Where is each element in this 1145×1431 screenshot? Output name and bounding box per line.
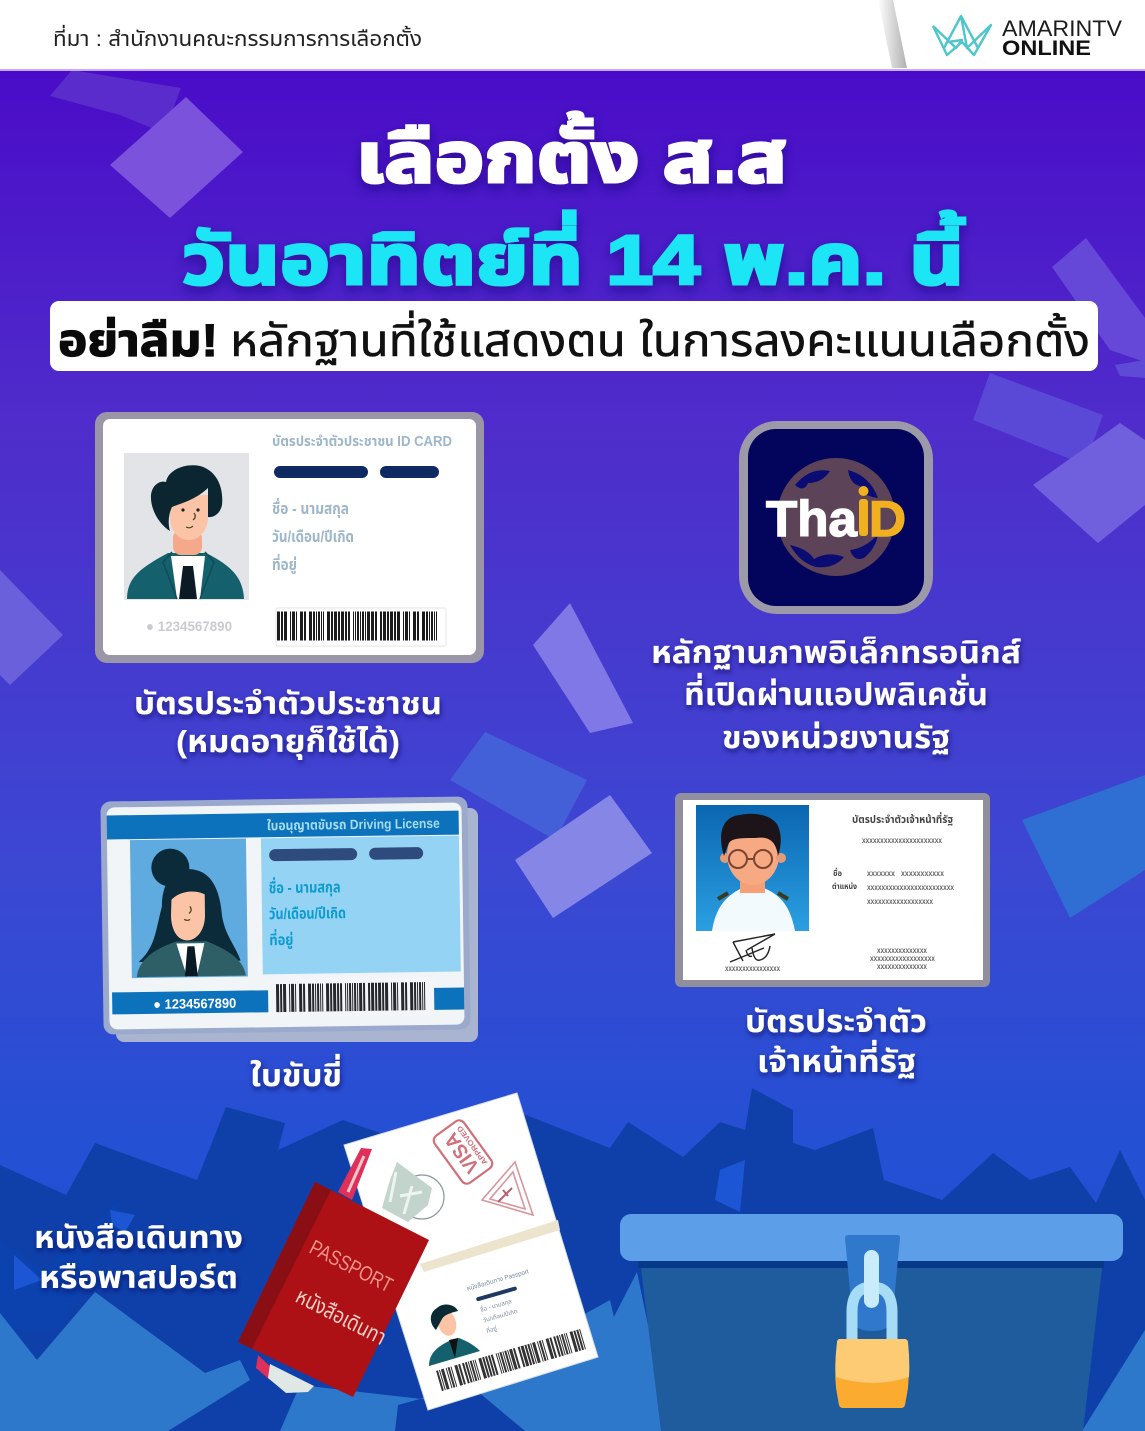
- panel: national ID card: [95, 412, 484, 663]
- license barcode: [268, 977, 434, 1017]
- official card field text: xxxxxxxxxxxxxxxxxxxxxx: [862, 836, 942, 845]
- passport barcode: [439, 1339, 583, 1381]
- caption: ThaiD: [651, 635, 1021, 755]
- caption: state official ID card: [745, 1004, 927, 1079]
- official card field text: xxxxxxxxxxxxxxxxxx: [867, 897, 933, 906]
- panel: passport illustration: [238, 1093, 598, 1410]
- license fields: ที่อยู่: [269, 928, 293, 950]
- official card field text: xxxxxxxxxxxxxxxxxxxxxxxx: [867, 883, 954, 892]
- caption: ThaiD: หลักฐานภาพอิเล็กทรอนิกส์: [651, 635, 1021, 670]
- panel: state official ID card: [675, 793, 990, 987]
- round stamp: [382, 1162, 444, 1222]
- ID card fields: [272, 497, 354, 575]
- caption: national ID card: [134, 686, 442, 760]
- official card field text: xxxxxxxxxxxxxx: [877, 962, 927, 971]
- ballot box body: [641, 1268, 1102, 1431]
- caption: passport: หรือพาสปอร์ต: [39, 1260, 238, 1295]
- caption: ThaiD: ที่เปิดผ่านแอปพลิเคชั่น: [684, 672, 988, 712]
- small portrait and page text: [429, 1267, 542, 1366]
- passport cover text (Thai): หนังสือเดินทา: [292, 1283, 390, 1350]
- ID card fields: วัน/เดือน/ปีเกิด: [272, 529, 354, 546]
- open passport pages: [344, 1093, 598, 1410]
- logo crown icon: [933, 16, 991, 55]
- panel: ThaiD app icon: [739, 421, 933, 614]
- caption: national ID card: บัตรประจำตัวประชาชน: [134, 686, 442, 721]
- subtitle: emphasis: อย่าลืม!: [58, 315, 218, 366]
- title line 2: date: วันอาทิตย์ที่ 14 พ.ค. นี้: [182, 211, 965, 299]
- official card field text: xxxxxxxxxxxxxx: [877, 946, 927, 955]
- panel: driving license: ● 1234567890: [153, 996, 236, 1012]
- official signature: [730, 934, 775, 962]
- small portrait and page text: หนังสือเดินทาง Passport: [466, 1267, 530, 1293]
- title line 1: เลือกตั้ง ส.ส: [356, 111, 787, 197]
- ballot box lid: [620, 1214, 1123, 1261]
- passport cover text: PASSPORT: [306, 1236, 396, 1297]
- ThaiD wordmark: [766, 486, 906, 547]
- small portrait and page text: ที่อยู่: [485, 1323, 498, 1335]
- license portrait: [130, 839, 248, 978]
- ID card name bars: [274, 466, 439, 478]
- triangle stamp: [482, 1162, 533, 1215]
- subtitle banner: [50, 301, 1098, 371]
- logo wordmark line 1: AMARINTV: [1002, 16, 1122, 41]
- ID card barcode: [276, 608, 446, 646]
- ThaiD seal: [777, 458, 895, 576]
- visa stamp: [431, 1118, 495, 1186]
- visa stamp: VISA: [440, 1128, 484, 1177]
- hasp: [864, 1250, 879, 1308]
- ID card fields: ที่อยู่: [272, 553, 297, 575]
- official card field text: xxxxxxx: [867, 869, 895, 878]
- license name bars: [269, 847, 423, 861]
- official card field text: ชื่อ: [833, 867, 842, 878]
- official portrait: [696, 805, 809, 931]
- ThaiD wordmark: D: [869, 491, 906, 547]
- clasp: [845, 1235, 900, 1331]
- padlock shackle: [852, 1287, 892, 1342]
- caption: state official ID card: บัตรประจำตัว: [745, 1004, 927, 1039]
- license fields: [268, 875, 346, 950]
- official card field text: [725, 836, 954, 973]
- license info panel: [261, 836, 461, 974]
- ballot box: [620, 1214, 1123, 1431]
- background: pile of ballots: [0, 1088, 1145, 1431]
- license number band: [112, 988, 464, 1014]
- official card field text: ตำแหน่ง: [832, 880, 857, 891]
- source note: ที่มา : สำนักงานคณะกรรมการการเลือกตั้ง: [53, 24, 422, 51]
- caption: passport: [34, 1220, 243, 1295]
- passport cover: [238, 1182, 429, 1397]
- subtitle: main text: หลักฐานที่ใช้แสดงตน ในการลงคะแนนเลือกตั้ง: [230, 310, 1090, 366]
- bookmarks and tucked pages: [256, 1148, 372, 1393]
- official card field text: xxxxxxxxxxxxxxxxxx: [870, 954, 935, 963]
- license heading: ใบอนุญาตขับรถ Driving License: [267, 816, 440, 834]
- visa stamp: APPROVED: [455, 1123, 489, 1166]
- official card heading: บัตรประจำตัวเจ้าหน้าที่รัฐ: [852, 812, 953, 826]
- background: paper confetti: [0, 70, 1145, 918]
- official card field text: xxxxxxxxxxx: [901, 869, 944, 878]
- title: [182, 111, 965, 299]
- ID card heading: บัตรประจำตัวประชาชน ID CARD: [272, 434, 452, 450]
- caption: national ID card: (หมดอายุก็ใช้ได้): [176, 724, 400, 760]
- license fields: ชื่อ - นามสกุล: [268, 875, 341, 897]
- logo: Amarin TV Online: [933, 16, 1122, 60]
- ID card number: ● 1234567890: [146, 618, 232, 634]
- caption: state official ID card: เจ้าหน้าที่รัฐ: [757, 1039, 916, 1079]
- ID card fields: ชื่อ - นามสกุล: [272, 497, 349, 518]
- official card field text: xxxxxxxxxxxxxxxx: [725, 964, 780, 973]
- padlock body: [835, 1339, 909, 1408]
- logo wordmark line 2: ONLINE: [1002, 37, 1091, 60]
- panel: driving license: [100, 796, 478, 1042]
- caption: ThaiD: ของหน่วยงานรัฐ: [722, 720, 950, 755]
- small portrait and page text: ชื่อ - นามสกุล: [478, 1296, 513, 1314]
- ID card portrait: [124, 453, 249, 600]
- license fields: วัน/เดือน/ปีเกิด: [269, 905, 346, 923]
- header bar: [0, 0, 1145, 71]
- caption: driving license: ใบขับขี่: [250, 1053, 342, 1093]
- caption: passport: หนังสือเดินทาง: [34, 1220, 243, 1255]
- small portrait and page text: วัน/เดือน/ปีเกิด: [483, 1308, 519, 1324]
- ThaiD wordmark: Tha: [766, 491, 858, 547]
